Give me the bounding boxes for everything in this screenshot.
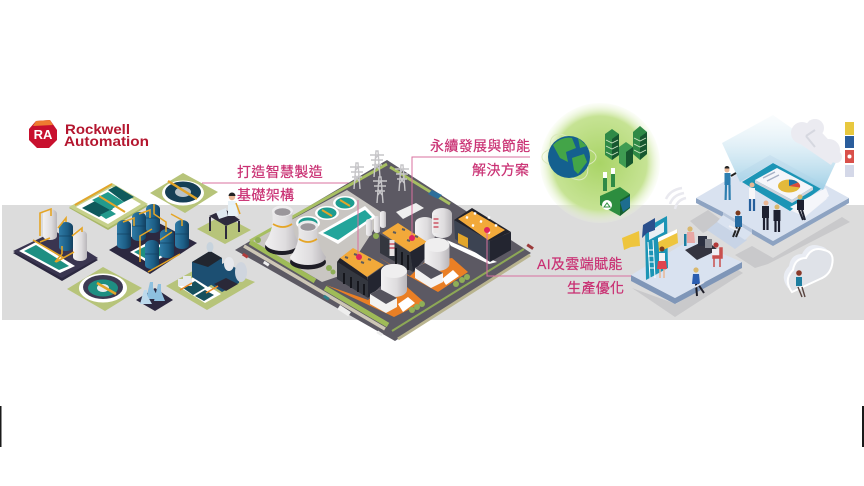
power block one — [337, 248, 415, 313]
heading: sustainability — [430, 138, 530, 178]
small silos — [366, 211, 386, 236]
heading: AI and cloud: AI及雲端賦能 — [537, 256, 623, 272]
marker dot: block two — [409, 235, 415, 241]
panel: bottom round clarifier — [67, 267, 142, 311]
cloud with woman — [784, 245, 833, 297]
light beam — [722, 115, 837, 190]
person in white shirt — [749, 182, 755, 211]
back storage tanks — [396, 203, 452, 242]
connector drop: block one — [357, 200, 359, 256]
water pool — [318, 206, 376, 244]
platform shadows — [632, 210, 850, 317]
panel: flasks — [136, 282, 173, 311]
seated person on stairs — [729, 210, 742, 237]
woman on ladder — [657, 246, 667, 278]
road edging — [244, 246, 385, 329]
logo: Rockwell Automation: RA — [34, 127, 53, 142]
left edge mark — [0, 406, 2, 447]
panel: round clarifier top — [150, 173, 218, 213]
icon: desk — [209, 208, 240, 239]
panel: central power plant — [235, 151, 534, 341]
illustration: green globe and city — [540, 103, 660, 223]
logo: Rockwell Automation: Rockwell — [65, 121, 130, 137]
lower platform — [631, 240, 742, 304]
gray background band — [2, 205, 864, 320]
panel: tanks platform left — [13, 209, 98, 281]
logo: Rockwell Automation — [29, 120, 149, 149]
right edge mark — [862, 406, 864, 447]
app icons — [845, 122, 854, 177]
heading: sustainability: 解決方案 — [472, 162, 529, 178]
connector line: smart manufacturing — [202, 183, 358, 200]
logo: Rockwell Automation: Automation — [64, 133, 149, 149]
heading: AI and cloud: 生產優化 — [567, 280, 624, 296]
icon: top cloud — [791, 119, 842, 165]
icon: recycling factory — [600, 168, 630, 216]
panel: scientist on desk — [197, 193, 251, 244]
round clarifiers — [296, 196, 357, 230]
stairs — [707, 212, 752, 249]
icon: scientist — [228, 193, 240, 216]
panel: green filter pools — [69, 183, 148, 230]
panel: blue tanks platform — [109, 204, 197, 274]
illustration: digital workspace platforms — [622, 115, 854, 317]
panel: control building — [166, 242, 255, 310]
marker dot: dark building — [484, 227, 490, 233]
heading: smart manufacturing: 打造智慧製造 — [237, 164, 323, 180]
phone and screen — [742, 163, 829, 217]
green glow — [540, 103, 660, 223]
seated person on phone — [797, 194, 805, 220]
marker dot: block one — [356, 254, 362, 260]
person with tablet — [724, 166, 736, 200]
people at workstation — [684, 226, 722, 267]
heading: sustainability: 永續發展與節能 — [430, 138, 530, 154]
suited person two — [774, 204, 780, 232]
icon: wifi — [666, 188, 686, 209]
cooling towers — [265, 206, 326, 270]
icon: green towers — [605, 126, 647, 168]
road base — [235, 160, 531, 341]
heading: smart manufacturing — [237, 164, 323, 203]
tablet with folder — [622, 216, 678, 280]
orange ground — [326, 257, 468, 317]
upper platform — [696, 155, 849, 246]
pylons — [350, 151, 409, 203]
right dark building — [454, 208, 511, 262]
power block two — [380, 223, 459, 288]
woman with laptop — [692, 267, 704, 296]
connector line: AI and cloud — [487, 229, 632, 276]
light ground — [252, 190, 384, 282]
white access road — [447, 240, 497, 264]
heading: AI and cloud — [537, 256, 624, 296]
heading: smart manufacturing: 基礎架構 — [237, 187, 294, 203]
connector line: sustainability — [412, 157, 530, 237]
suited person — [762, 200, 769, 230]
icon: globe — [542, 128, 596, 186]
road traffic — [242, 190, 534, 336]
trees — [255, 233, 470, 313]
people on top platform — [724, 166, 805, 237]
